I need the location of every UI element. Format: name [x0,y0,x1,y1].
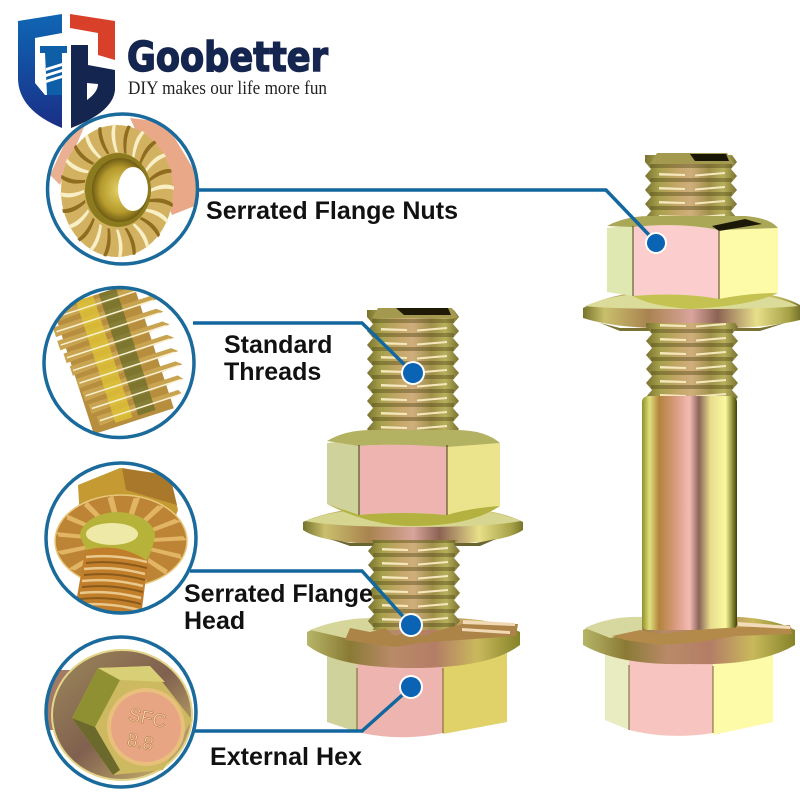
bolt: right assembly [583,153,800,736]
panel: standard threads close-up [44,276,195,438]
middle thread [646,323,738,400]
icon: shield monogram [18,14,115,128]
logo: Goobetter brand [18,14,329,128]
panel: serrated flange head close-up [46,463,196,625]
upper thread [367,308,459,436]
upper flange [583,290,800,331]
lower flange [307,618,520,668]
lower hex head [605,650,773,736]
panel: external hex close-up: 8.8 [125,730,155,756]
panel: external hex close-up [46,637,196,787]
label: Serrated Flange Nuts: Serrated Flange Nuts [206,197,458,225]
tagline: DIY makes our life more fun [128,79,327,99]
brand name: Goobetter [127,33,329,81]
label: External Hex: External Hex [210,743,362,771]
marker dots [399,232,667,699]
upper flange [303,506,523,546]
upper nut [607,216,778,309]
lower thread [368,540,460,630]
panel: serrated flange nut close-up [48,114,198,264]
label: Standard Threads: Standard [224,331,332,359]
lower flange [583,616,795,664]
upper thread [645,153,737,216]
serration highlight [738,622,790,629]
head marking: SFC [126,704,168,733]
lower hex head [327,650,507,737]
label: Serrated Flange Head: Serrated Flange [184,580,373,608]
label: Standard Threads: Threads [224,358,321,386]
bolt: left assembly [303,308,523,737]
callout lines and connectors [190,190,650,731]
flange serrations [345,624,518,647]
flange serrations [612,625,792,645]
serration highlights [462,620,515,634]
smooth shank [642,396,737,630]
upper nut [327,430,500,526]
label: Serrated Flange Head: Head [184,607,245,635]
